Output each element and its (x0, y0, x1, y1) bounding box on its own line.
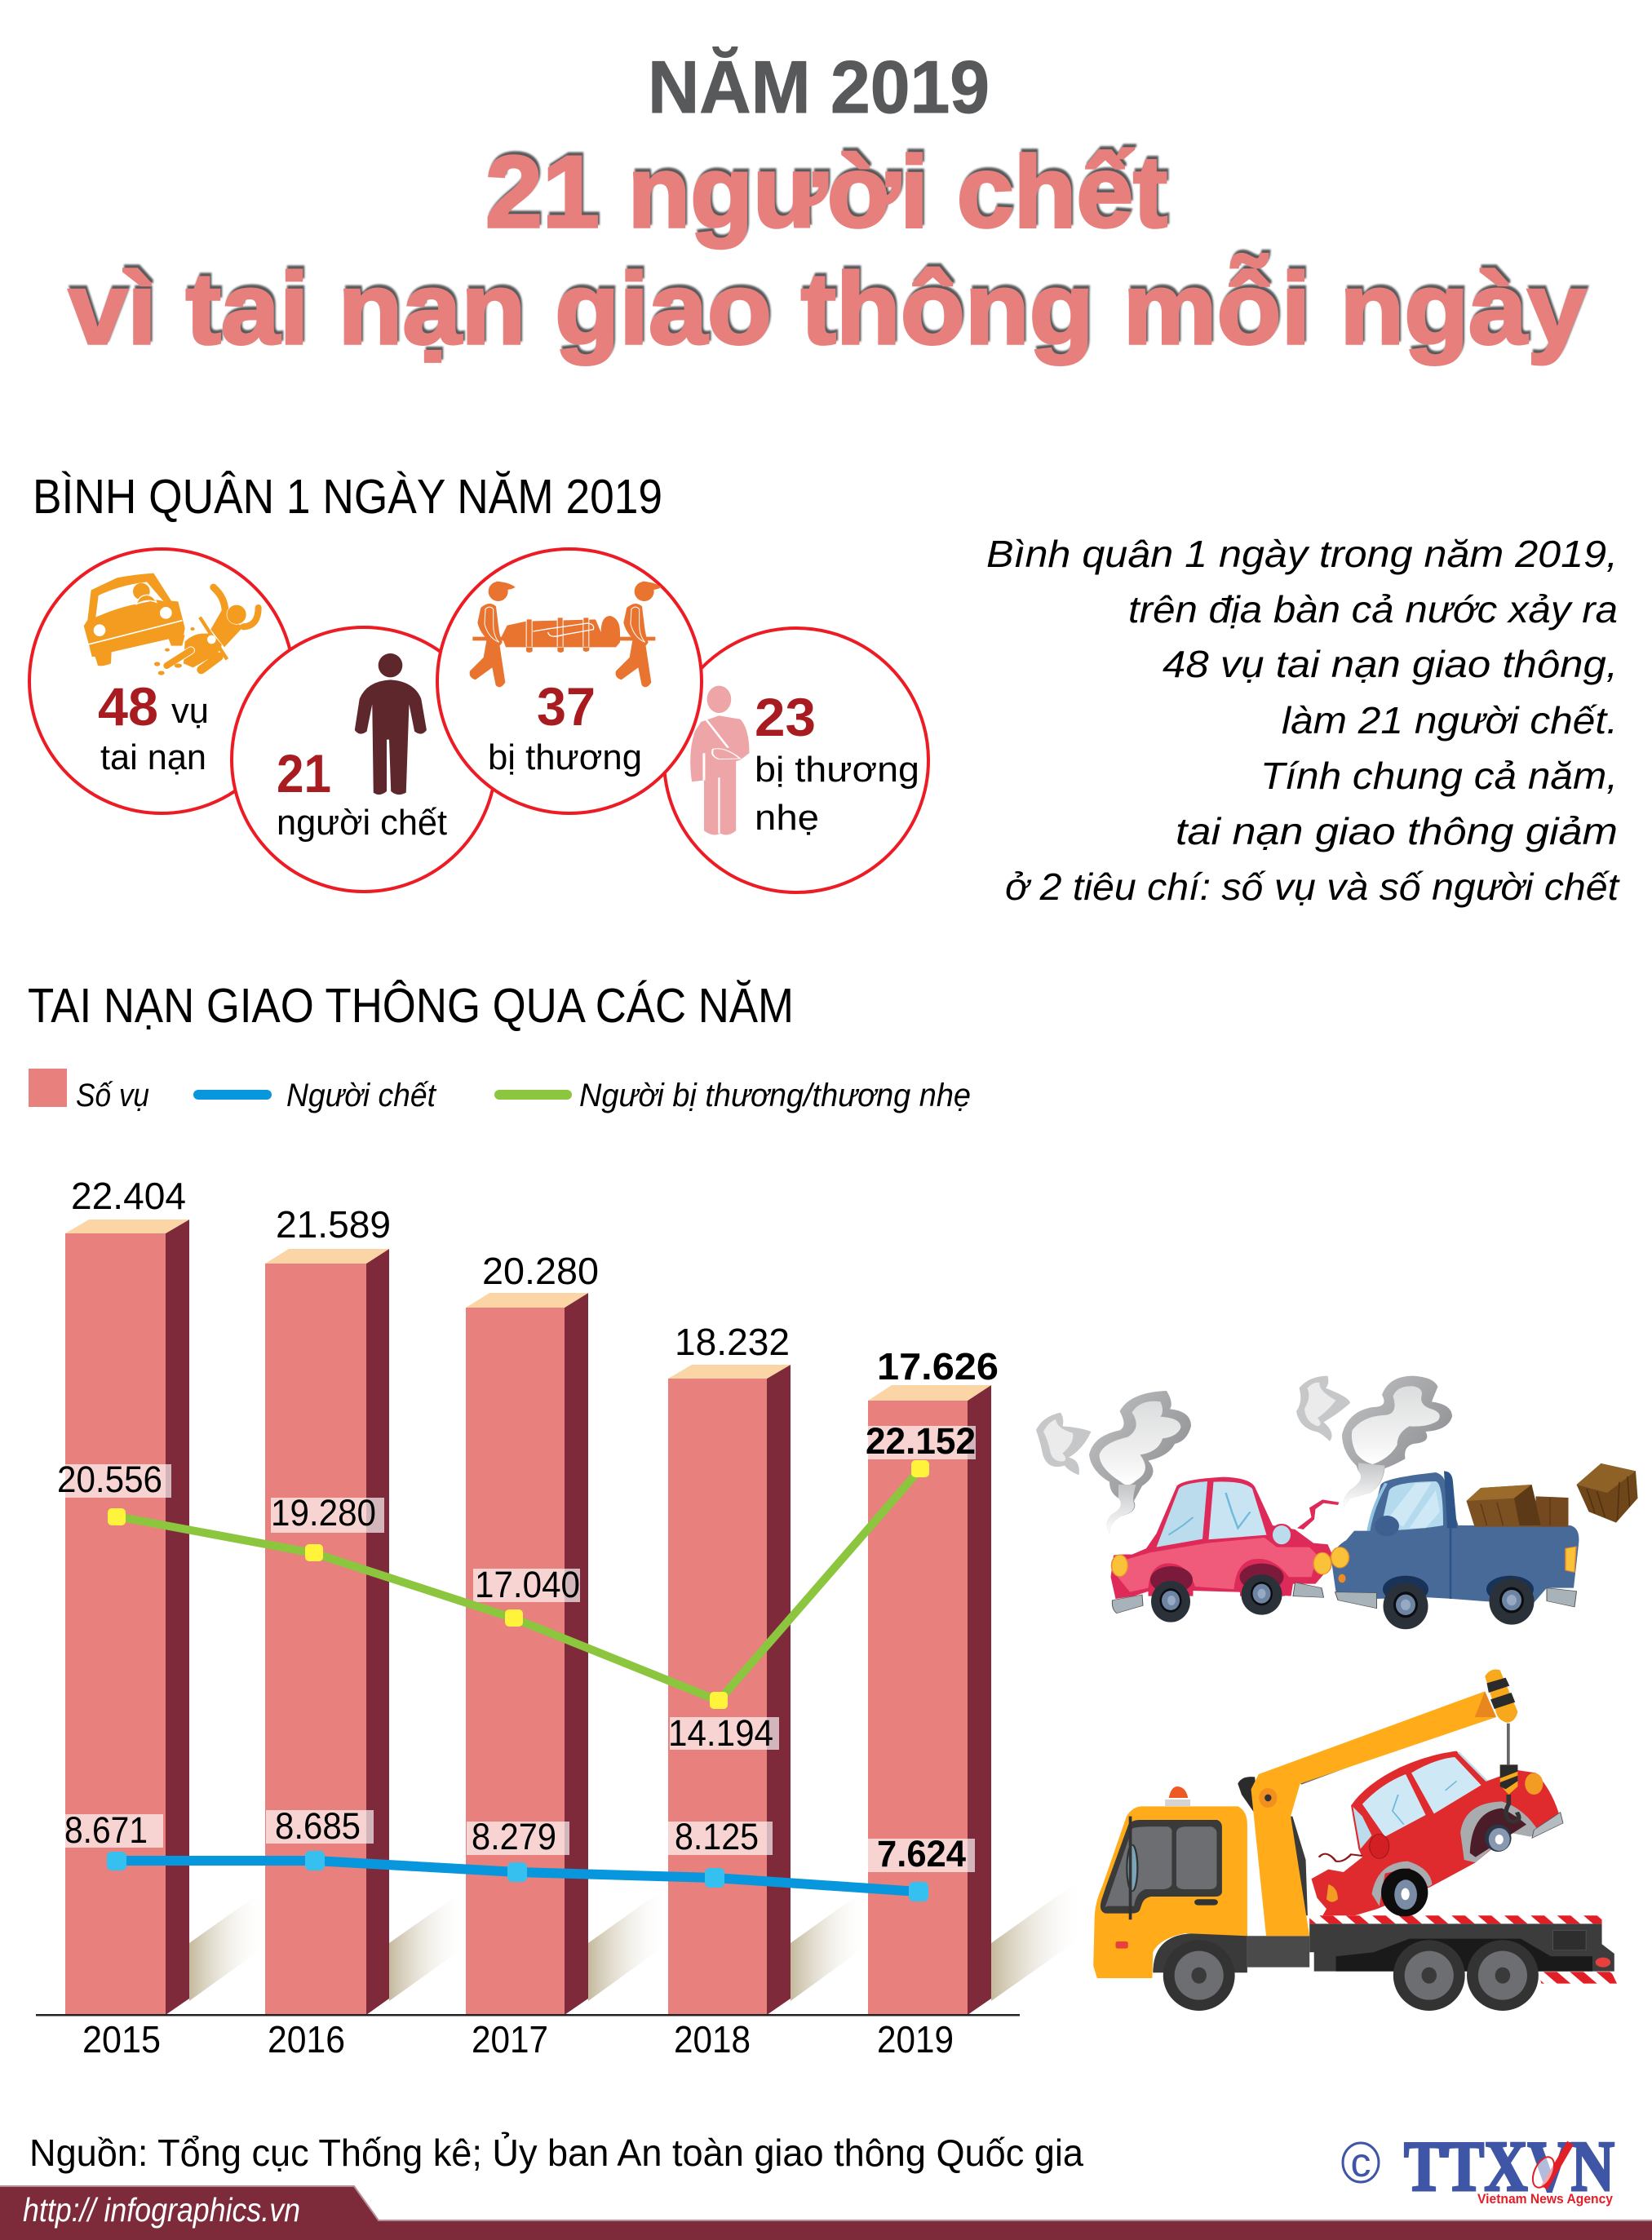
text block: summary paragraph: tai nạn giao thông giảm (1176, 810, 1618, 852)
title: headline: vì tai nạn giao thông mỗi ngày (69, 253, 1586, 365)
year axis labels (82, 2018, 954, 2061)
text block: summary paragraph: làm 21 người chết. (1282, 699, 1618, 742)
bar: 2016 (265, 1249, 389, 2015)
title: year line: NĂM 2019 (648, 46, 990, 129)
logo globe swoosh (1529, 2143, 1570, 2191)
text block: summary paragraph: trên địa bàn cả nước xảy ra (1128, 588, 1618, 631)
label: vụ: vụ (171, 691, 209, 731)
vehicle: blue pickup (1331, 1471, 1579, 1629)
injured value labels: 22.152 (866, 1420, 976, 1462)
bar chart: accidents 2015-2019 (36, 1175, 1085, 2061)
bar shadows (189, 1876, 1085, 2001)
illustration: tow truck lifting wrecked car (1093, 1670, 1617, 2011)
footer url: http:// infographics.vn (23, 2191, 300, 2229)
legend item: người chết (193, 1078, 437, 1113)
bar values: 21.589 (276, 1203, 391, 1246)
bar: 2018 (668, 1365, 791, 2015)
smoke: right wisp (1296, 1376, 1350, 1441)
icon: man with arm in sling (690, 686, 749, 835)
deaths value labels: 7.624 (877, 1833, 966, 1875)
title: headline (69, 136, 1586, 365)
legend item: người bị thương: Người bị thương/thương nhẹ (579, 1078, 971, 1113)
legend item: số vụ (29, 1069, 149, 1113)
icon: standing man (355, 653, 427, 795)
injured markers (108, 1460, 929, 1709)
bar values: 20.280 (482, 1250, 599, 1292)
label: tai nạn: tai nạn (100, 737, 206, 777)
line chart: deaths (blue) (64, 1805, 975, 1901)
illustration: collision of red car and blue pickup (1036, 1376, 1638, 1629)
stat: 37: 37 (537, 676, 596, 737)
year axis labels: 2019 (877, 2018, 954, 2061)
circle: 37 injured (437, 549, 702, 813)
text block: summary paragraph: Bình quân 1 ngày trong năm 2019, (986, 533, 1618, 575)
deaths value labels: 8.685 (275, 1805, 361, 1847)
legend item: người chết: Người chết (286, 1078, 437, 1113)
legend item: số vụ: Số vụ (76, 1078, 149, 1113)
deaths value labels: 8.279 (472, 1816, 556, 1857)
year axis labels: 2016 (268, 2018, 345, 2061)
source note: Nguồn: Tổng cục Thống kê; Ủy ban An toàn giao thông Quốc gia (29, 2132, 1083, 2174)
injured value labels: 14.194 (668, 1712, 773, 1754)
icon: stretcher bearers (470, 582, 662, 687)
deaths markers (107, 1851, 928, 1901)
year axis labels: 2017 (472, 2018, 548, 2061)
year axis labels: 2018 (674, 2018, 751, 2061)
logo tagline: Vietnam News Agency (1477, 2191, 1613, 2207)
circle: 23 lightly injured (664, 628, 928, 892)
bar values (71, 1175, 999, 1388)
bar values: 17.626 (877, 1345, 999, 1388)
text block: summary paragraph: 48 vụ tai nạn giao thông, (1163, 643, 1618, 685)
bar: 2017 (466, 1293, 588, 2015)
legend (29, 1069, 971, 1113)
bar values: 22.404 (71, 1175, 186, 1217)
stat: 21: 21 (277, 743, 331, 803)
panel: daily average circles (29, 549, 928, 892)
text block: summary paragraph: Tính chung cả năm, (1260, 755, 1618, 797)
bar: 2019 (868, 1385, 991, 2015)
deaths value labels: 8.125 (675, 1816, 759, 1857)
bar: 2015 (65, 1220, 189, 2015)
text block: summary paragraph (986, 533, 1620, 908)
copyright mark (1343, 2140, 1379, 2185)
truck cab (1093, 1786, 1247, 1978)
wrecked red car on hook (1311, 1751, 1563, 1916)
deaths value labels (64, 1805, 975, 1875)
circle: 48 accidents (29, 549, 294, 813)
footer band with URL (0, 2186, 1652, 2240)
deaths value labels: 8.671 (64, 1809, 148, 1851)
circle: 21 deaths (232, 627, 496, 892)
truck boom crane (1238, 1670, 1517, 1936)
cargo: wooden crates (1467, 1463, 1638, 1527)
injured value labels: 19.280 (271, 1492, 376, 1534)
smoke: left wisp (1036, 1413, 1092, 1475)
icon: car hitting motorbike (84, 573, 259, 675)
label: người chết: người chết (277, 803, 447, 843)
smoke: right plume (1342, 1376, 1452, 1507)
axis line (36, 2014, 1020, 2016)
deaths trend line (117, 1861, 919, 1892)
injured value labels (57, 1420, 976, 1754)
label: bị thương: bị thương (488, 737, 642, 777)
line chart: injured (green) (57, 1420, 976, 1754)
bar values: 18.232 (675, 1321, 790, 1363)
heading: daily average: BÌNH QUÂN 1 NGÀY NĂM 2019 (33, 470, 662, 524)
stat: 48: 48 (98, 676, 158, 737)
injured value labels: 17.040 (475, 1564, 580, 1605)
text block: summary paragraph: ở 2 tiêu chí: số vụ và số người chết (1005, 865, 1620, 908)
title (69, 46, 1586, 365)
stat: 23: 23 (755, 687, 816, 747)
label: nhẹ: nhẹ (755, 798, 819, 838)
title: headline: 21 người chết (485, 136, 1167, 249)
truck wheels (1163, 1940, 1539, 2011)
logo wordmark: TTXVN (1404, 2127, 1614, 2207)
injured trend line (117, 1469, 920, 1701)
copyright mark: c (1351, 2140, 1371, 2185)
truck chassis (1153, 1915, 1617, 1984)
smoke: left plume (1089, 1391, 1191, 1534)
logo: TTXVN (1343, 2127, 1614, 2207)
vehicle: red car (1111, 1477, 1340, 1622)
year axis labels: 2015 (82, 2018, 161, 2061)
heading: accidents over the years: TAI NẠN GIAO THÔNG QUA CÁC NĂM (28, 979, 794, 1033)
injured value labels: 20.556 (57, 1459, 162, 1500)
label: bị thương: bị thương (755, 750, 919, 790)
